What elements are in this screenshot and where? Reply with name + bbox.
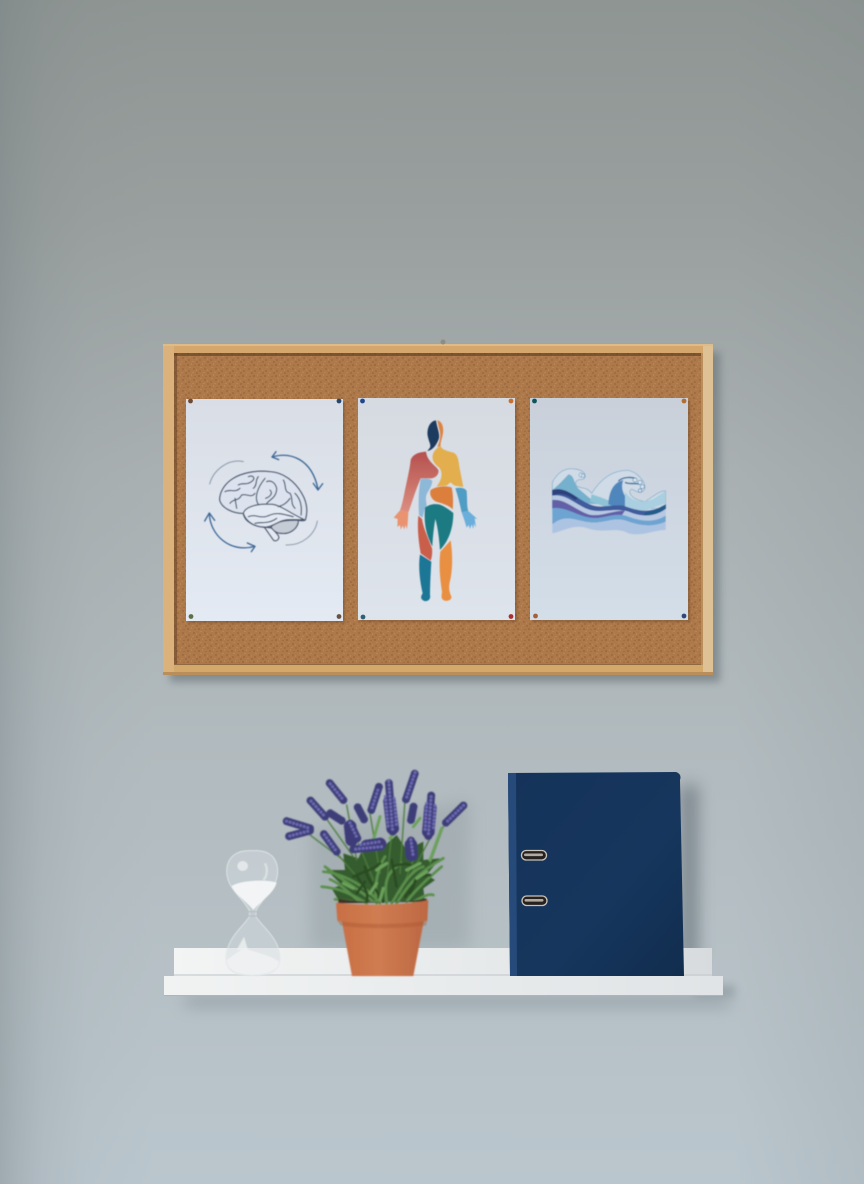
binder shadow — [680, 785, 698, 960]
pins — [188, 399, 341, 619]
poster: colourful human figure — [358, 398, 517, 622]
pins — [532, 399, 686, 618]
binder — [508, 772, 684, 976]
illustration: ocean waves — [552, 469, 666, 534]
poster: brain with arrows — [186, 399, 345, 623]
binder ring holes — [522, 850, 547, 906]
potted lavender — [285, 772, 465, 976]
arrows: cycle around brain — [205, 452, 323, 552]
figure: segmented body — [394, 420, 477, 601]
hourglass — [226, 851, 280, 976]
shelf shadow — [185, 985, 735, 1006]
corkboard — [163, 340, 720, 682]
foliage — [310, 800, 443, 903]
icon: brain line drawing — [220, 471, 307, 541]
plant shadow — [310, 800, 470, 950]
flowers — [285, 772, 465, 857]
poster: waves — [530, 398, 690, 622]
pot — [338, 898, 427, 903]
pins — [360, 399, 513, 619]
shelf — [164, 948, 723, 996]
